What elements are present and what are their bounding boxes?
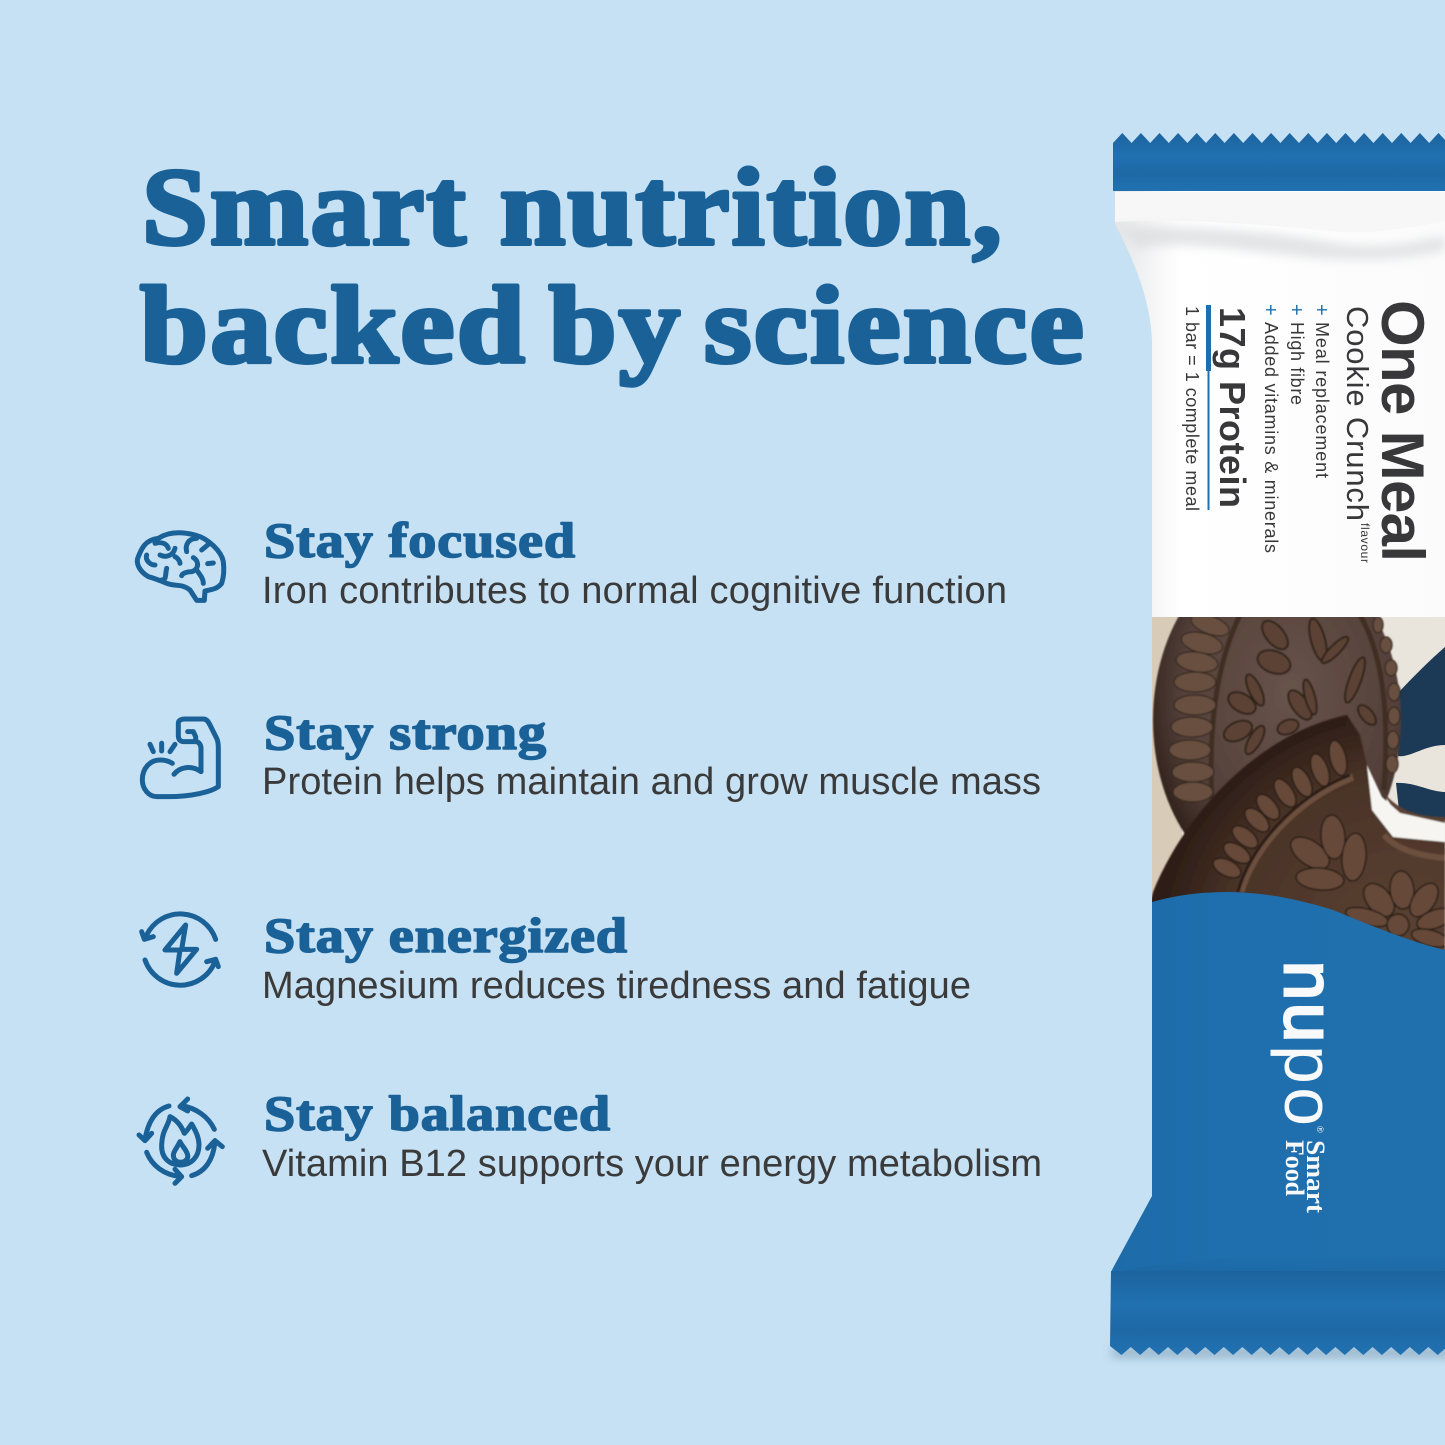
icon: flame cycle	[139, 1099, 222, 1183]
subheading: Stay strong	[264, 704, 547, 760]
bottom shadow	[1112, 1348, 1445, 1357]
icon: brain	[137, 533, 224, 600]
description: Vitamin B12 supports your energy metabolism	[262, 1143, 1042, 1185]
label: protein claim: 17g Protein	[1212, 307, 1253, 508]
benefit: stay focused	[137, 512, 1007, 612]
benefit: stay strong	[142, 704, 1041, 803]
brand logo: Smart	[1301, 1140, 1330, 1213]
benefit: stay balanced	[139, 1085, 1042, 1185]
heading	[140, 146, 1086, 386]
front cookie	[1152, 714, 1445, 950]
bottom crimp with zigzag edge	[1110, 1271, 1445, 1355]
description: Protein helps maintain and grow muscle mass	[262, 761, 1041, 803]
cookie photo	[1152, 617, 1445, 950]
label: flavour note: flavour	[1358, 523, 1372, 563]
top crimp with zigzag edge	[1113, 133, 1445, 191]
label: serving note: 1 bar = 1 complete meal	[1182, 306, 1202, 511]
brand logo	[1270, 961, 1348, 1213]
label: claims list: Added vitamins & minerals	[1261, 322, 1281, 553]
icon: flexed arm	[142, 719, 218, 797]
brand logo: Food	[1280, 1140, 1309, 1197]
wrapper white top section	[1115, 190, 1445, 620]
description: Magnesium reduces tiredness and fatigue	[262, 965, 971, 1007]
navy backdrop	[1396, 647, 1445, 820]
label: product name: One Meal	[1369, 300, 1436, 562]
back cookie	[1152, 617, 1402, 834]
top biscuit rim	[1385, 795, 1445, 824]
icon: lightning cycle	[142, 914, 218, 985]
label: claims list: +	[1285, 304, 1307, 316]
heading: backed by science	[140, 264, 1086, 386]
label: claims list: Meal replacement	[1312, 322, 1332, 478]
infographic canvas	[134, 133, 1445, 1362]
subheading: Stay balanced	[264, 1085, 611, 1141]
benefit: stay energized	[142, 907, 971, 1007]
lower fold shading	[1112, 1255, 1445, 1272]
label: protein rule	[1206, 305, 1211, 510]
product: nutrition bar wrapper	[1110, 133, 1445, 1357]
label: claims list: +	[1310, 304, 1332, 316]
wrapper blue body with wave	[1111, 892, 1445, 1272]
description: Iron contributes to normal cognitive function	[262, 570, 1007, 612]
brand logo: ®	[1315, 1126, 1325, 1133]
label: claims list: +	[1259, 304, 1281, 316]
label: flavour: Cookie Crunch	[1340, 306, 1375, 521]
brand logo: nu po	[1270, 961, 1348, 1126]
heading: Smart nutrition,	[142, 146, 1004, 268]
label: claims list: High fibre	[1287, 322, 1307, 405]
label: claims list	[1259, 304, 1332, 553]
subheading: Stay focused	[264, 512, 576, 568]
cream filling	[1367, 765, 1445, 845]
subheading: Stay energized	[264, 907, 628, 963]
